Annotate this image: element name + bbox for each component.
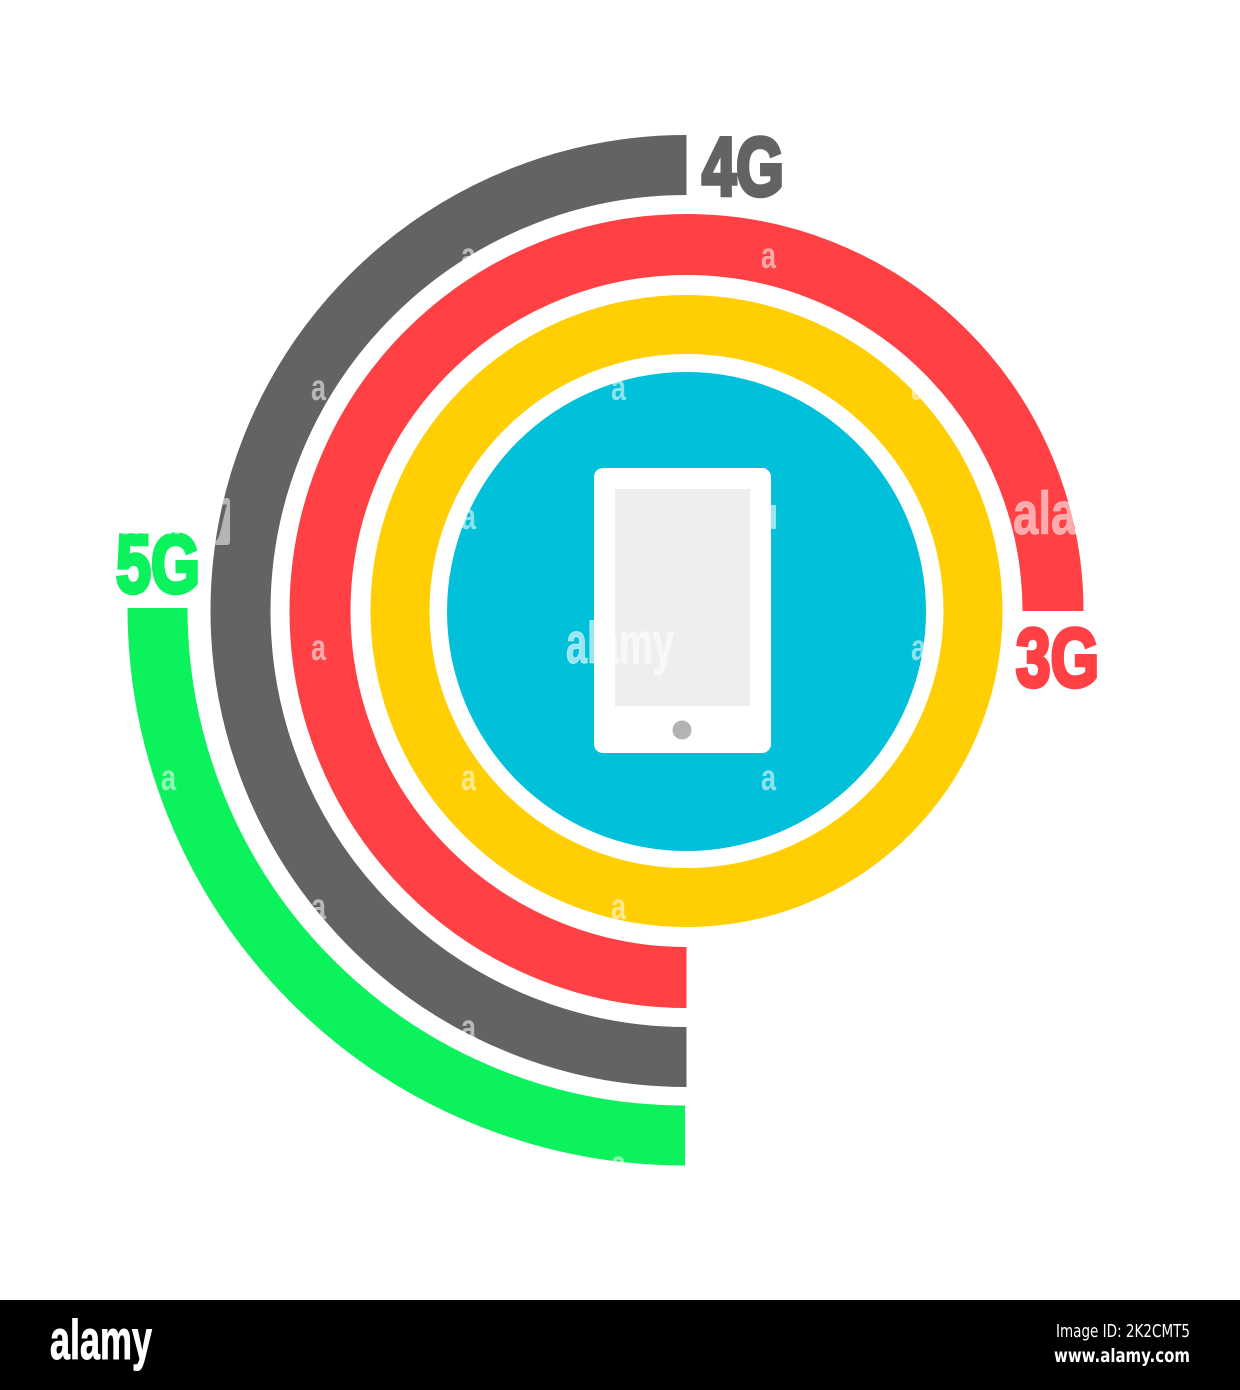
watermark tiles: a xyxy=(161,757,176,798)
watermark tiles: a xyxy=(761,235,776,276)
watermark: fragment over 5G label: alam xyxy=(118,482,206,547)
watermark tiles: a xyxy=(311,886,326,927)
watermark tiles: a xyxy=(911,627,926,668)
watermark tiles: a xyxy=(461,496,476,537)
watermark: center alamy: alamy xyxy=(566,611,674,676)
arc: 3G red xyxy=(320,244,1053,978)
footer logo: alamy xyxy=(50,1308,152,1371)
watermark tiles: a xyxy=(911,367,926,408)
watermark tiles: a xyxy=(611,886,626,927)
label: 3G: 3G xyxy=(1016,611,1099,704)
watermark tiles: a xyxy=(761,757,776,798)
label: 5G: 5G xyxy=(116,517,200,610)
ring: yellow xyxy=(400,324,973,898)
watermark tiles: a xyxy=(461,1007,476,1048)
footer image id: Image ID: 2K2CMT5 xyxy=(1056,1321,1190,1342)
watermark tiles: a xyxy=(611,1143,626,1184)
watermark tiles: a xyxy=(311,627,326,668)
watermark: fragment on gray arc xyxy=(215,498,230,545)
label: 4G: 4G xyxy=(702,120,784,213)
watermark tiles: a xyxy=(311,367,326,408)
watermark: fragment right of phone xyxy=(768,505,776,529)
watermark tiles: a xyxy=(611,367,626,408)
phone body xyxy=(594,468,771,753)
phone xyxy=(594,468,771,753)
center circle: blue xyxy=(447,372,926,851)
arc: 5G green xyxy=(158,608,685,1136)
watermark: large fragment on red arc: alam xyxy=(1013,480,1117,547)
watermark tiles xyxy=(161,235,926,1184)
phone button xyxy=(672,720,692,740)
watermark tiles: a xyxy=(461,235,476,276)
footer url: www.alamy.com xyxy=(1054,1345,1190,1367)
footer bar xyxy=(0,1300,1240,1390)
watermark: fragment on gray arc: y xyxy=(209,486,227,542)
phone screen xyxy=(615,489,750,706)
watermark tiles: a xyxy=(461,757,476,798)
arc: 4G gray xyxy=(241,165,686,1057)
